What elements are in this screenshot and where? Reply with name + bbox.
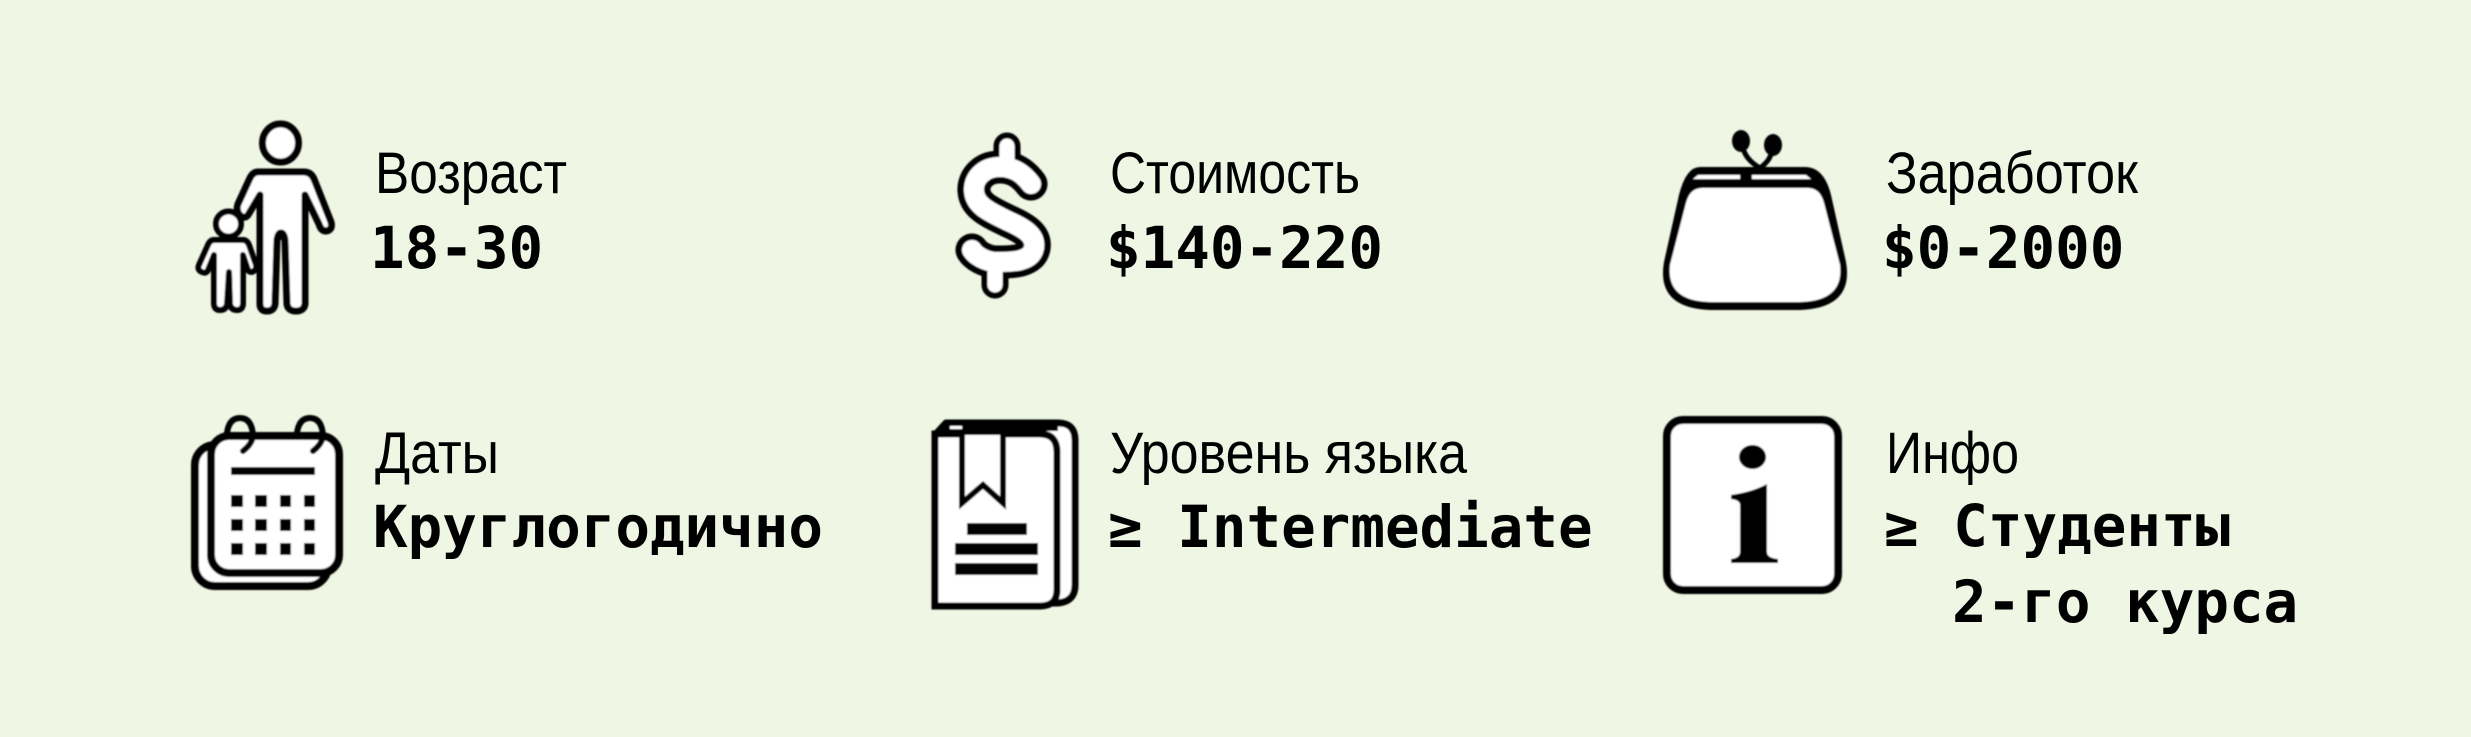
label: language level: Уровень языка <box>1110 421 1468 486</box>
panel: info <box>1667 420 2298 636</box>
panel: language level <box>935 420 1593 606</box>
value: age: 18-30 <box>370 215 543 282</box>
label: info: Инфо <box>1886 421 2019 486</box>
value: cost: $140-220 <box>1106 215 1383 282</box>
label: earnings: Заработок <box>1886 141 2139 206</box>
icon: book with bookmark <box>935 420 1075 606</box>
value: language level: ≥ Intermediate <box>1108 494 1593 561</box>
panel: earnings <box>1663 130 2139 310</box>
panel: cost <box>972 141 1383 285</box>
label: age: Возраст <box>375 141 567 206</box>
value: info, line two: 2-го курса <box>1952 569 2298 636</box>
icon: calendar <box>195 418 339 586</box>
value: earnings: $0-2000 <box>1882 215 2124 282</box>
panel: dates <box>195 418 823 586</box>
panel: age <box>198 124 567 311</box>
icon: coin purse <box>1663 130 1847 310</box>
label: dates: Даты <box>375 421 499 486</box>
icon: information sign <box>1667 420 1838 590</box>
label: cost: Стоимость <box>1110 141 1360 206</box>
icon: dollar sign <box>972 146 1034 285</box>
value: info, line one: ≥ Студенты <box>1884 493 2230 560</box>
value: dates: Круглогодично <box>373 494 823 561</box>
icon: adult and child <box>198 124 331 311</box>
